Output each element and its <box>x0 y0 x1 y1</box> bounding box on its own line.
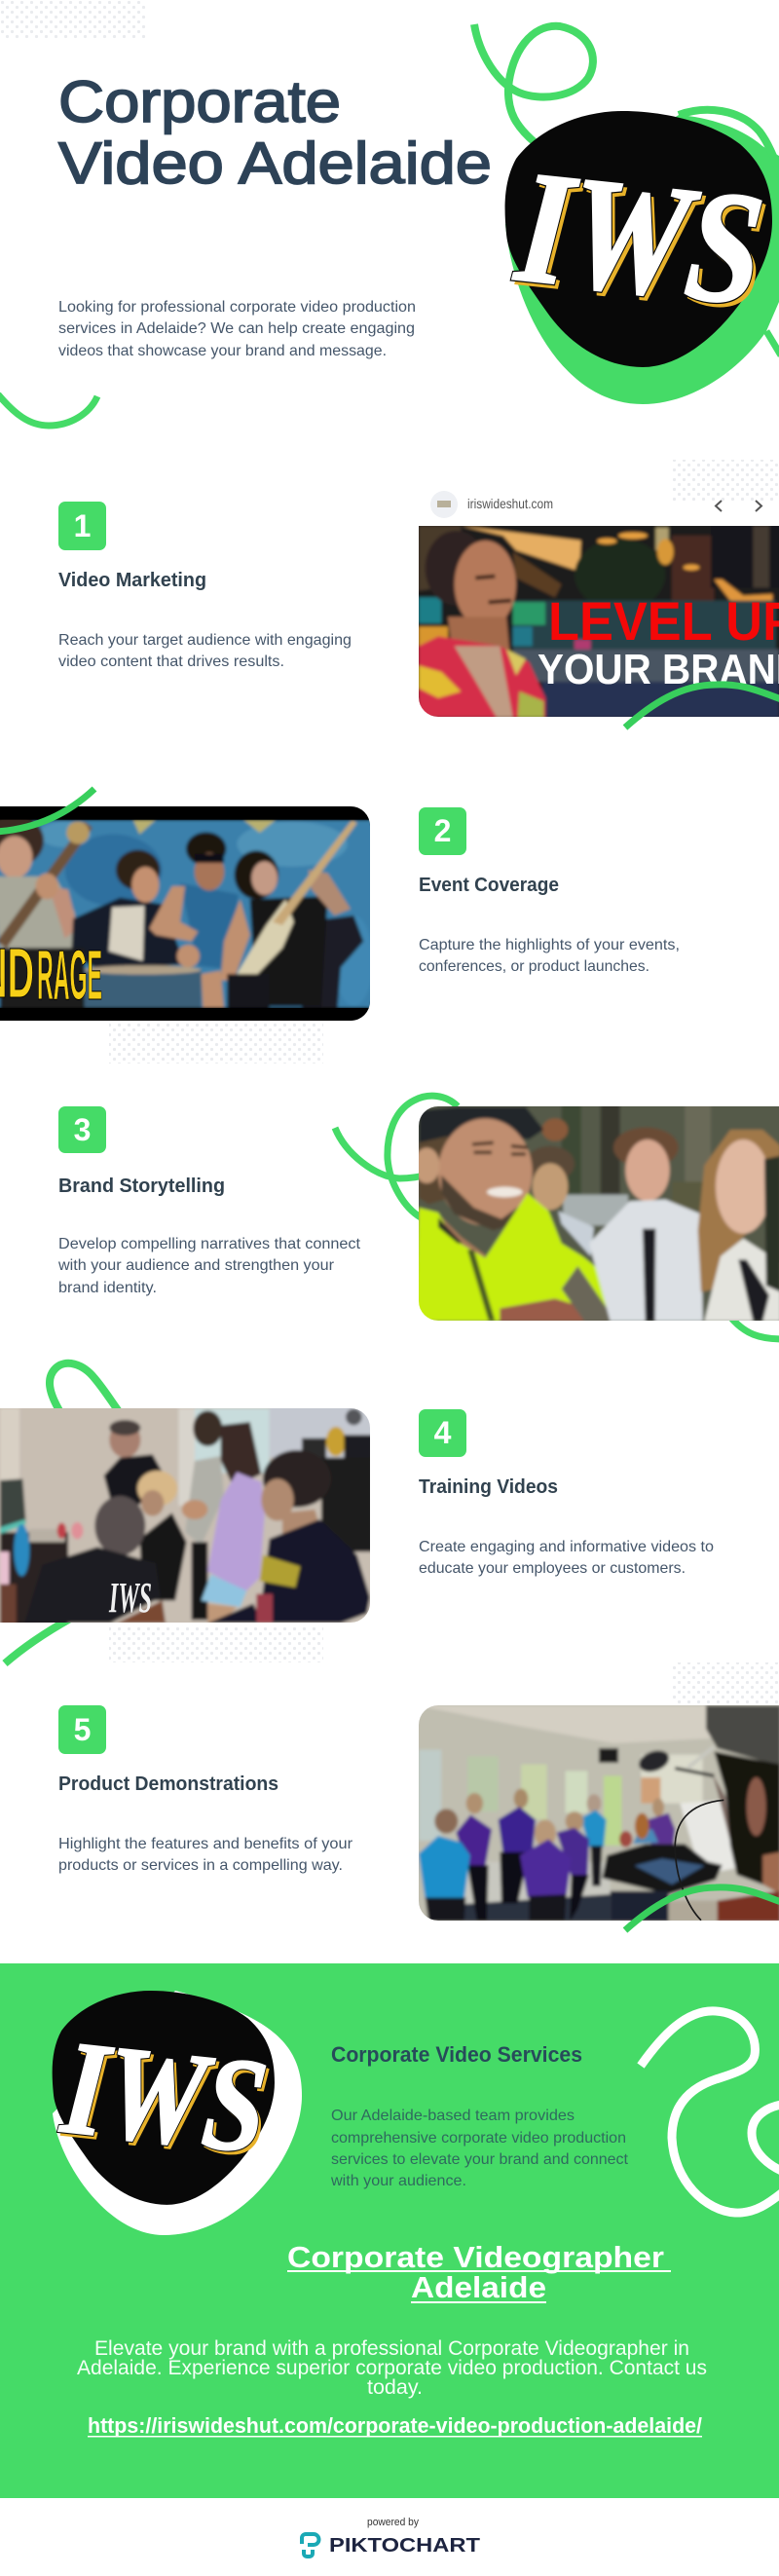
number badge 4: 4 <box>434 1415 452 1450</box>
green blob behind logo <box>505 115 779 404</box>
photo: choir being filmed <box>409 1699 779 1926</box>
band background <box>0 1963 779 2498</box>
number badge 4 <box>419 1409 466 1457</box>
panel: event coverage <box>419 807 680 975</box>
black logo blob small: IWS <box>57 2015 277 2185</box>
photo: team in editing studio <box>0 1402 380 1629</box>
body: brand storytelling <box>57 1236 361 1296</box>
link heading: corporate videographer adelaide: Adelaide <box>411 2270 546 2304</box>
body: product demonstrations: products or services in a compelling way. <box>58 1857 343 1874</box>
number badge 1: 1 <box>74 508 91 543</box>
heading: corporate video services: Corporate Video Services <box>331 2042 582 2067</box>
panel: video marketing <box>58 502 352 670</box>
dot pattern: section 5 <box>673 1662 779 1705</box>
browser header: site name and arrows <box>430 491 761 518</box>
number badge 1 <box>58 502 106 550</box>
photo band name lettering <box>0 949 101 1000</box>
photo: level up your brand <box>419 526 779 717</box>
body: video marketing <box>58 632 352 670</box>
call to action text: Elevate your brand with a professional Corporate Videographer in <box>94 2337 689 2360</box>
title: Corporate <box>58 69 341 134</box>
intro paragraph: Looking for professional corporate video production <box>58 299 416 316</box>
green arc bottom left of hero <box>0 394 97 426</box>
link: website url: https://iriswideshut.com/corporate-video-production-adelaide/ <box>88 2413 702 2438</box>
jacket lettering IWS: IWS <box>108 1574 152 1622</box>
green arc lower right <box>766 331 779 355</box>
green arc top right <box>679 110 779 180</box>
body: brand storytelling: with your audience and strengthen your <box>57 1257 335 1274</box>
number badge 3 <box>58 1106 106 1153</box>
photo: band on couch <box>0 806 380 1023</box>
dot pattern: section 1 <box>673 460 779 502</box>
panel: green call to action band <box>0 1963 779 2498</box>
browser header: site name and arrows: iriswideshut.com <box>467 496 553 511</box>
body: product demonstrations <box>58 1836 353 1874</box>
piktochart wordmark: PIKTOCHART <box>329 2535 480 2557</box>
icon: piktochart mark <box>302 2534 319 2557</box>
green arc over photo 5 <box>625 1887 779 1930</box>
squiggle above logo <box>474 24 593 143</box>
photo: band on couch: RAGE <box>37 937 102 1015</box>
green arc over photo 2 <box>0 789 94 832</box>
black logo blob small: IWS <box>55 2011 274 2182</box>
green arc over photo 1 <box>625 685 779 728</box>
black logo blob small: IWS <box>55 2011 274 2182</box>
body: product demonstrations: Highlight the features and benefits of your <box>58 1836 353 1852</box>
white blob behind logo <box>53 1991 302 2235</box>
intro paragraph: videos that showcase your brand and message. <box>58 343 387 359</box>
body: brand storytelling: Develop compelling narratives that connect <box>58 1236 361 1252</box>
green squiggle behind photo 4 <box>5 1363 121 1663</box>
heading: training videos: Training Videos <box>419 1476 558 1498</box>
heading: event coverage: Event Coverage <box>419 875 559 896</box>
green squiggle behind photo 3 <box>335 1096 779 1339</box>
body: training videos <box>419 1539 714 1577</box>
body: event coverage <box>419 937 680 975</box>
heading: video marketing: Video Marketing <box>58 570 206 591</box>
link heading: corporate videographer adelaide <box>287 2240 671 2304</box>
body: corporate video services <box>330 2108 629 2189</box>
body: corporate video services: services to elevate your brand and connect <box>331 2151 629 2168</box>
photo: crew smiling outdoors <box>409 1101 779 1327</box>
panel: brand storytelling <box>57 1106 361 1296</box>
number badge 5 <box>58 1705 106 1754</box>
call to action text: Adelaide. Experience superior corporate video production. Contact us <box>77 2357 707 2379</box>
intro paragraph <box>58 299 416 359</box>
body: video marketing: Reach your target audience with engaging <box>58 632 352 649</box>
number badge 3: 3 <box>74 1112 91 1147</box>
body: corporate video services: Our Adelaide-based team provides <box>331 2108 575 2124</box>
panel: product demonstrations <box>58 1705 353 1874</box>
body: corporate video services: with your audience. <box>330 2173 466 2189</box>
number badge 5: 5 <box>74 1712 91 1747</box>
heading: product demonstrations: Product Demonstrations <box>58 1773 278 1795</box>
call to action text <box>77 2337 707 2399</box>
heading: brand storytelling: Brand Storytelling <box>58 1176 225 1197</box>
body: training videos: educate your employees or customers. <box>419 1560 686 1577</box>
dot pattern: section 2 <box>109 1024 323 1064</box>
footer: powered by piktochart <box>302 2517 480 2557</box>
white squiggle <box>641 2011 779 2213</box>
body: video marketing: video content that drives results. <box>58 653 284 670</box>
body: training videos: Create engaging and informative videos to <box>419 1539 714 1555</box>
title <box>58 69 492 196</box>
number badge 2 <box>419 807 466 855</box>
body: event coverage: Capture the highlights of your events, <box>419 937 680 953</box>
body: brand storytelling: brand identity. <box>58 1280 157 1296</box>
body: corporate video services: comprehensive corporate video production <box>331 2130 626 2147</box>
hero logo with green blob and squiggle <box>474 24 779 404</box>
title: Video Adelaide <box>58 131 492 196</box>
powered by label: powered by <box>367 2517 419 2528</box>
dot pattern: section 4 <box>109 1625 323 1662</box>
black logo blob small <box>53 1991 277 2205</box>
dot pattern: top left <box>0 0 146 39</box>
link heading: corporate videographer adelaide: Corporate Videographer <box>287 2240 664 2274</box>
intro paragraph: services in Adelaide? We can help create engaging <box>58 320 415 337</box>
body: event coverage: conferences, or product launches. <box>419 958 649 975</box>
panel: training videos <box>419 1409 714 1577</box>
footer logo with white blob <box>53 1991 302 2235</box>
number badge 2: 2 <box>434 813 451 848</box>
black logo blob <box>505 111 772 367</box>
call to action text: today. <box>367 2376 423 2399</box>
